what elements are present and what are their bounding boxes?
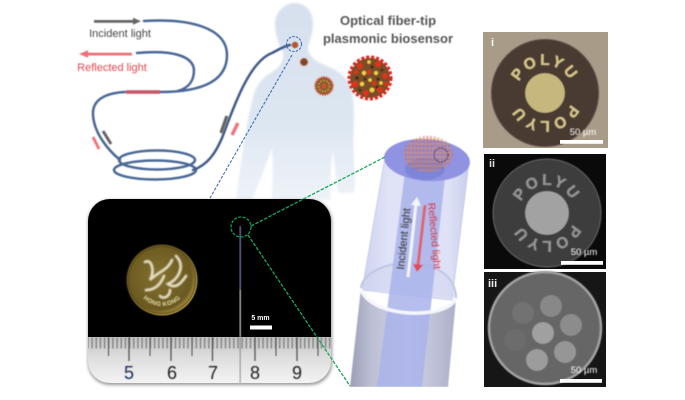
incident light arrow top [94,18,141,25]
panel iii: electron micrograph [484,272,606,387]
lower sleeve [350,288,456,387]
fiber core [377,172,445,387]
virus large [349,57,391,99]
black dashed circle [434,148,448,162]
ruler: 9 [292,363,302,383]
small grey arrow lower left [103,131,111,144]
ruler: 7 [208,363,218,383]
nanopillar array [403,136,453,172]
POLYU lettering: POLYU [514,224,582,252]
ruler [87,337,331,383]
panel: photo with coin and ruler [86,198,334,387]
scale bar: 50 µm [570,127,596,138]
ruler: 6 [167,363,177,383]
blue dashed circle [286,36,302,52]
sleeve rim [361,289,456,313]
coin: HONG KONG [143,295,180,307]
POLYU lettering [512,174,582,252]
reflected light arrow top [79,50,132,58]
incident light vertical label: Incident light [395,208,413,270]
scale bar: 50 µm [571,247,597,258]
scale bar: 50 µm [571,365,597,376]
virus smallest [292,42,298,48]
title: plasmonic biosensor [323,31,453,46]
viruses [292,42,391,99]
POLYU lettering: POLYU [510,53,578,82]
panel label: iii [488,278,497,290]
fiber tip enlarged illustration [350,136,471,387]
POLYU lettering: POLYU [512,174,580,202]
reflected light vertical label: Reflected light [425,202,443,270]
incident light label: Incident light [89,28,151,40]
upper cladding [362,157,469,300]
human silhouette [236,3,355,200]
panel label: i [491,37,494,49]
green dashed connector upper [251,157,385,226]
virus medium [315,77,333,95]
ruler: 5 [124,363,134,383]
fiber red grating segment [126,90,160,94]
blue dashed line to body [210,55,292,198]
scale bar: 5 mm [251,315,270,322]
panel i: optical micrograph [483,32,608,148]
coin [126,244,198,316]
white incident arrow [408,197,421,277]
small red arrow right [232,123,238,135]
small red arrow lower left [93,137,99,149]
panel label: ii [489,158,495,170]
green dashed circle [231,217,251,237]
panel ii: electron micrograph [484,154,606,269]
POLYU lettering: POLYU [512,104,580,133]
small grey arrow right [221,116,227,133]
sleeve back rim [361,263,456,298]
title: Optical fiber-tip [340,13,436,28]
fiber in photo [240,226,241,337]
core face [405,158,445,180]
reflected light label: Reflected light [77,62,147,74]
title [323,13,453,46]
optical fiber loop [93,20,290,180]
virus small [300,58,308,66]
ruler: 8 [250,363,260,383]
red reflected arrow [413,205,425,272]
scale bar [250,315,272,330]
top face [384,138,470,182]
etched dots [504,295,582,371]
green dashed connector lower [248,235,350,386]
POLYU lettering [510,53,580,133]
